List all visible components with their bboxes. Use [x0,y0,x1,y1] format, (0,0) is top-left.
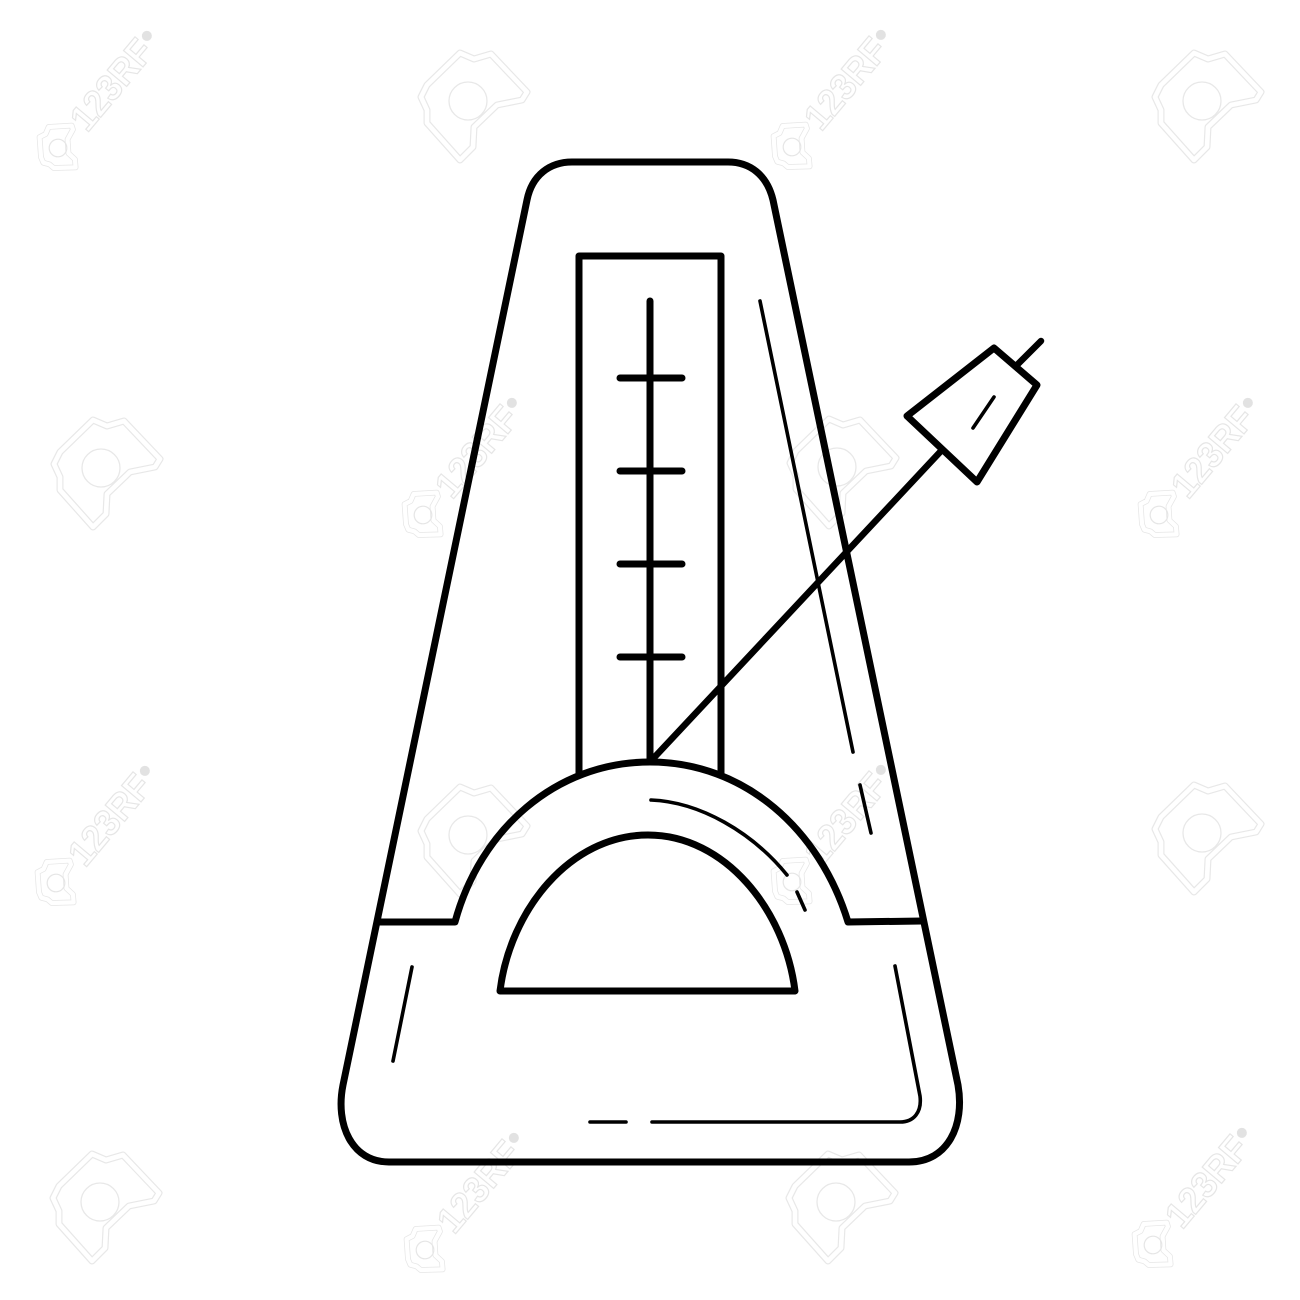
inner arch opening [500,835,795,991]
metronome body outline [341,162,960,1162]
watermarks: 123RF stamps: 123RF [60,766,160,874]
highlight strokes [393,301,994,1122]
metronome icon [341,162,1041,1162]
watermarks: 123RF stamps: 123RF [427,398,527,506]
pendulum weight [907,348,1037,482]
watermarks: 123RF stamps: 123RF [1163,398,1263,506]
tempo scale [620,301,682,760]
watermarks: 123RF stamps: 123RF [796,30,896,138]
watermarks: 123RF stamps: 123RF [62,31,162,139]
scale window [579,256,721,775]
right side highlight [760,301,853,752]
base arch and collar [378,762,922,922]
pendulum tip [1017,341,1041,365]
watermarks: 123RF stamps: 123RF [1157,1128,1257,1236]
arch highlight [651,800,787,875]
watermarks: 123RF stamps: 123RF [429,1133,529,1241]
base right highlight [652,966,920,1122]
pendulum arm [650,451,941,762]
weight highlight [973,397,994,428]
base left highlight [393,967,412,1061]
watermarks: 123RF stamps: 123RF [796,765,896,873]
